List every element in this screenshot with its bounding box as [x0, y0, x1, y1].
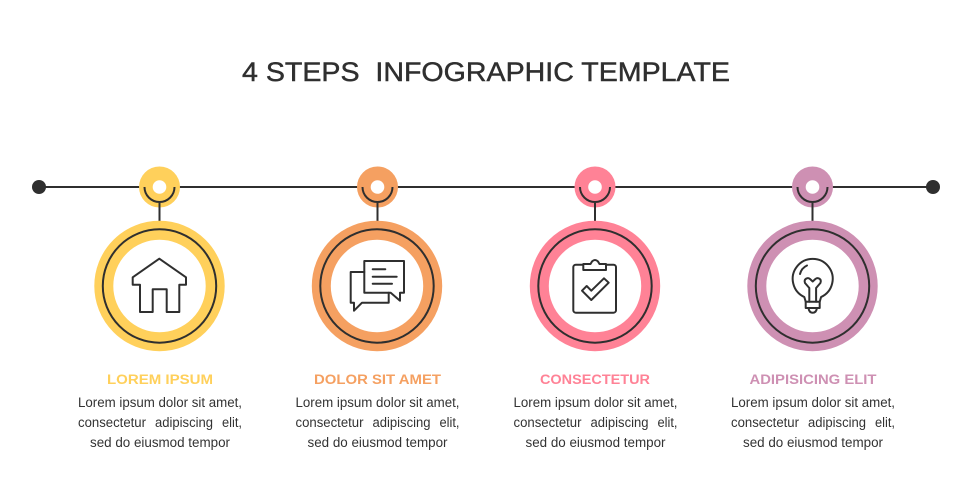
timeline end dot — [926, 180, 940, 194]
title: 4 STEPS INFOGRAPHIC TEMPLATE — [242, 57, 730, 87]
step 4 marker — [792, 166, 833, 230]
step 2 text: sed do eiusmod tempor — [308, 435, 448, 450]
step 1 text: adipiscing — [155, 415, 213, 430]
panel: step 2 — [296, 166, 460, 450]
panel: step 4 — [731, 166, 895, 450]
step 1 marker — [139, 166, 180, 230]
step 3 text: consectetur — [514, 415, 582, 430]
step 2 heading: DOLOR SIT AMET — [314, 372, 442, 387]
step 2 text: adipiscing — [372, 415, 430, 430]
step 1 text: elit, — [222, 415, 242, 430]
step 4 ring — [756, 229, 869, 343]
step 4 text: Lorem ipsum dolor sit amet, — [731, 395, 895, 410]
step 1 text: sed do eiusmod tempor — [90, 435, 231, 450]
step 2 ring — [320, 229, 434, 343]
panel: step 1 — [78, 166, 242, 450]
step 2 text: Lorem ipsum dolor sit amet, — [296, 395, 460, 410]
step 4 text: consectetur — [731, 415, 800, 430]
icon: chat bubbles — [351, 261, 404, 311]
panel: step 3 — [514, 166, 678, 450]
timeline start dot — [32, 180, 46, 194]
step 3 heading: CONSECTETUR — [540, 372, 650, 387]
step 2 marker — [357, 166, 398, 230]
icon: house — [133, 259, 186, 312]
step 4 text: adipiscing — [808, 415, 866, 430]
icon: clipboard with check — [573, 260, 616, 313]
step 4 text: sed do eiusmod tempor — [743, 435, 884, 450]
step 3 text: sed do eiusmod tempor — [526, 435, 666, 450]
step 1 text: consectetur — [78, 415, 147, 430]
step 2 text: consectetur — [296, 415, 364, 430]
step 3 marker — [574, 166, 616, 230]
step 3 text: Lorem ipsum dolor sit amet, — [514, 395, 678, 410]
step 3 text: elit, — [658, 415, 678, 430]
step 4 heading: ADIPISICING ELIT — [750, 372, 877, 387]
timeline — [32, 180, 940, 194]
icon: light bulb — [793, 259, 833, 313]
step 3 text: adipiscing — [590, 415, 648, 430]
step 4 text: elit, — [875, 415, 895, 430]
step 1 ring — [103, 229, 216, 343]
step 1 heading: LOREM IPSUM — [107, 372, 213, 387]
step 2 text: elit, — [440, 415, 460, 430]
step 3 ring — [538, 229, 652, 343]
step 1 text: Lorem ipsum dolor sit amet, — [78, 395, 242, 410]
